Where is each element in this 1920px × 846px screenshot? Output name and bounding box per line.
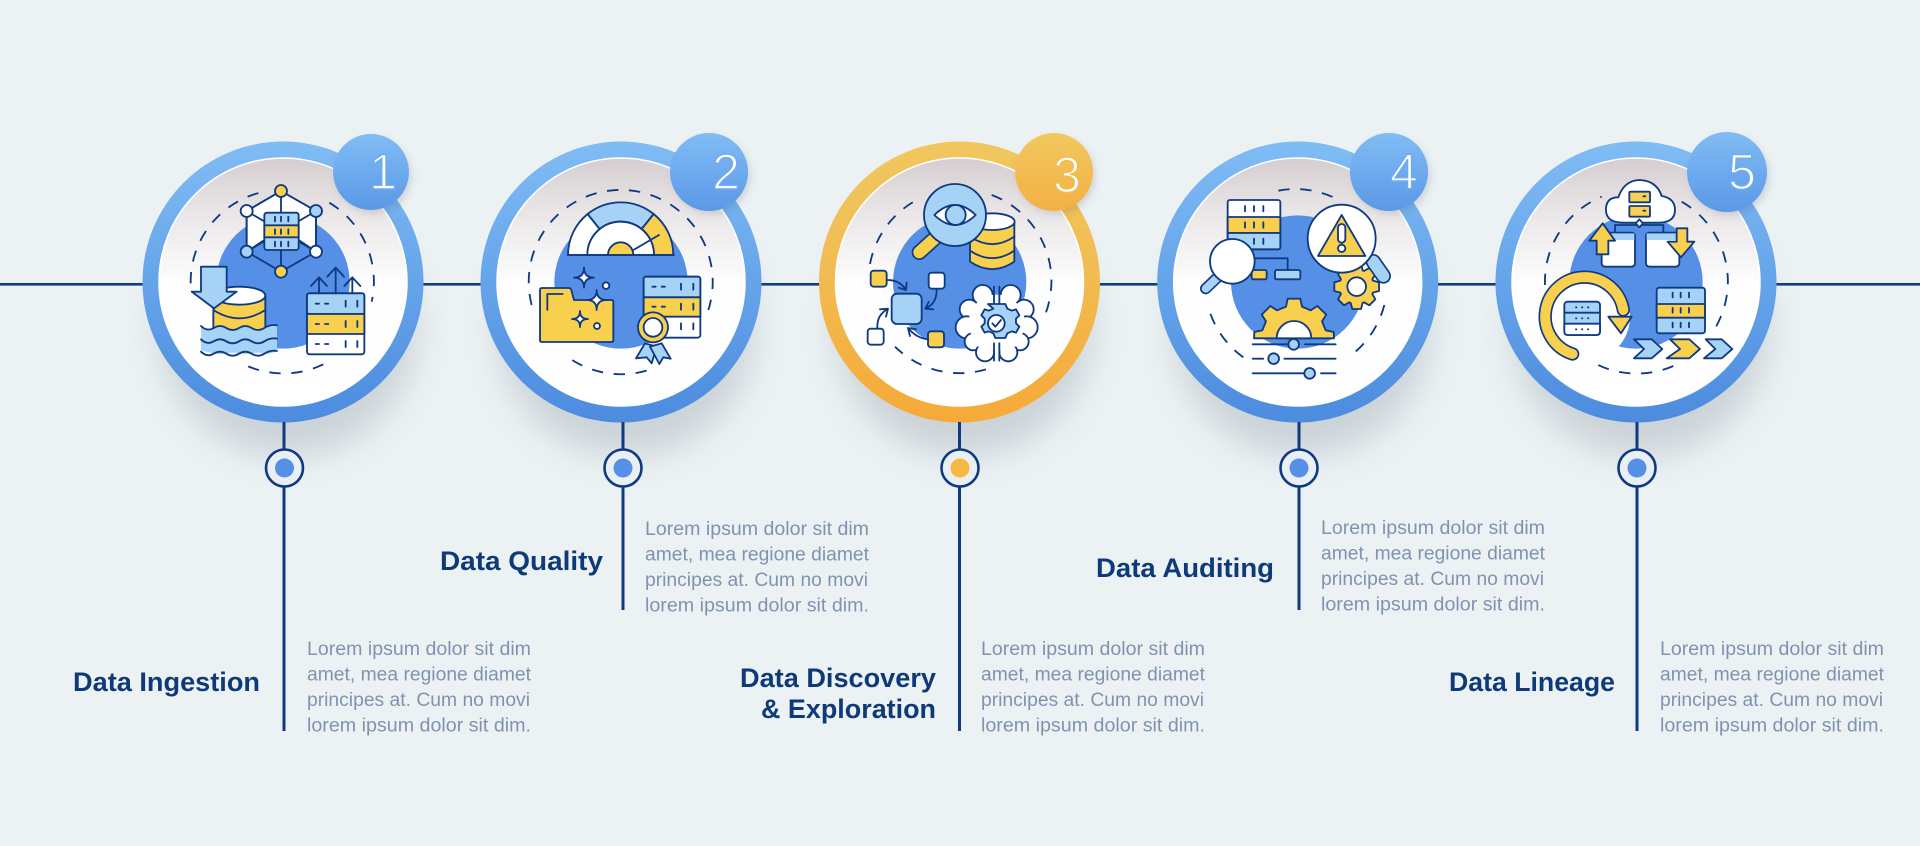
text block: step 1: principes at. Cum no movi (307, 690, 530, 711)
heading: Data Discovery & Exploration: & Exploration (761, 694, 936, 724)
step 5 circle: 5 (1728, 144, 1756, 200)
step 1 circle (142, 134, 424, 456)
step 4 circle (1157, 133, 1438, 456)
heading: Data Lineage: Data Lineage (1449, 667, 1615, 697)
text block: step 5: Lorem ipsum dolor sit dim (1660, 639, 1884, 660)
text block: step 5: lorem ipsum dolor sit dim. (1660, 716, 1884, 736)
text block: step 2: amet, mea regione diamet (645, 544, 870, 566)
icon: data quality (529, 190, 713, 374)
text block: step 1 (307, 639, 532, 736)
step 3 circle (819, 133, 1100, 456)
heading: Data Discovery & Exploration (740, 663, 936, 724)
connector and node: step 2 (604, 422, 642, 610)
text block: step 4: Lorem ipsum dolor sit dim (1321, 518, 1545, 539)
text block: step 2: lorem ipsum dolor sit dim. (645, 596, 869, 616)
timeline horizontal line (0, 283, 1920, 286)
icon: data auditing (1206, 189, 1384, 379)
step 1 circle: 1 (369, 144, 397, 200)
text block: step 5: principes at. Cum no movi (1660, 690, 1883, 711)
step 2 circle (480, 133, 762, 456)
text block: step 4: amet, mea regione diamet (1321, 544, 1546, 564)
connector and node: step 4 (1280, 422, 1318, 610)
connector and node: step 3 (942, 422, 978, 731)
connector and node: step 1 (266, 422, 303, 731)
text block: step 2 (645, 519, 870, 616)
text block: step 2: Lorem ipsum dolor sit dim (645, 519, 869, 540)
text block: step 3: principes at. Cum no movi (981, 690, 1204, 711)
heading: Data Auditing: Data Auditing (1096, 553, 1274, 583)
heading: Data Discovery & Exploration: Data Discovery (740, 663, 936, 693)
text block: step 2: principes at. Cum no movi (645, 570, 868, 591)
text block: step 1: lorem ipsum dolor sit dim. (307, 716, 531, 736)
text block: step 4: principes at. Cum no movi (1321, 569, 1544, 590)
text block: step 5 (1660, 639, 1885, 736)
text block: step 3: Lorem ipsum dolor sit dim (981, 639, 1205, 660)
icon: data lineage (1540, 180, 1732, 374)
step 4 circle: 4 (1390, 144, 1418, 200)
text block: step 1: Lorem ipsum dolor sit dim (307, 639, 531, 660)
heading: Data Ingestion: Data Ingestion (73, 667, 260, 697)
icon: data ingestion (191, 185, 374, 373)
text block: step 1: amet, mea regione diamet (307, 664, 532, 686)
text block: step 3 (981, 639, 1206, 736)
connector and node: step 5 (1618, 422, 1656, 731)
text block: step 3: amet, mea regione diamet (981, 664, 1206, 686)
step 5 circle (1496, 132, 1776, 456)
step 2 circle: 2 (712, 144, 740, 200)
heading: Data Quality: Data Quality (440, 546, 603, 576)
text block: step 5: amet, mea regione diamet (1660, 664, 1885, 686)
icon: data discovery (868, 184, 1051, 373)
text block: step 4 (1321, 518, 1546, 616)
step 3 circle: 3 (1053, 147, 1081, 203)
text block: step 3: lorem ipsum dolor sit dim. (981, 716, 1205, 736)
text block: step 4: lorem ipsum dolor sit dim. (1321, 594, 1545, 616)
